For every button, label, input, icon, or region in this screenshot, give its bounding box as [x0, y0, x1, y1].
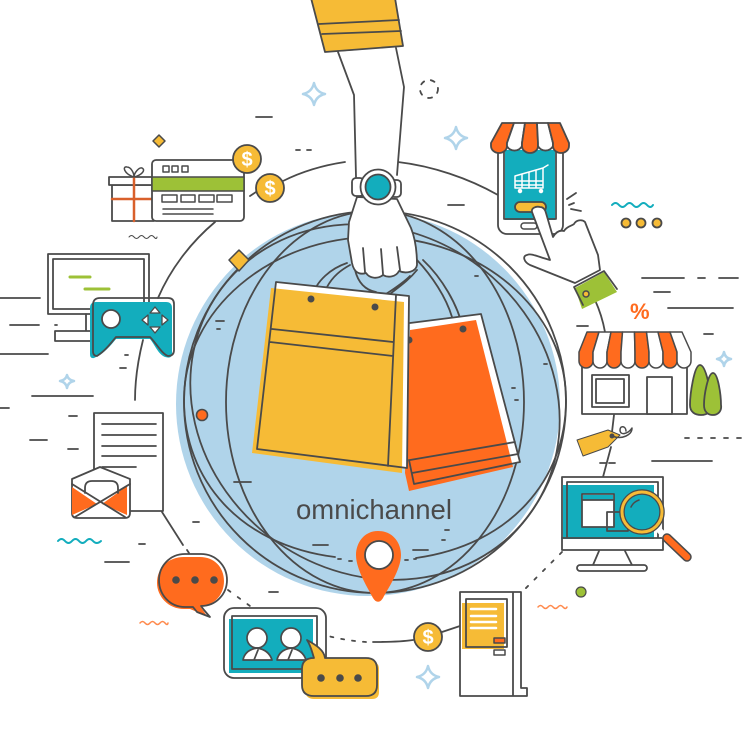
pointing hand [524, 193, 617, 309]
dollar coin 2 [250, 174, 284, 202]
dollar coin bottom: $ [422, 627, 434, 649]
shopping cart [515, 165, 548, 192]
dollar coin bottom [414, 623, 442, 651]
trees [690, 365, 721, 415]
forearm [338, 48, 404, 180]
teal wave left [58, 539, 101, 543]
yellow speech bubble [302, 640, 379, 699]
orange wave bottom-left [140, 622, 168, 624]
letter document [94, 413, 163, 511]
title text: omnichannel [296, 494, 452, 525]
awning [579, 332, 691, 368]
sleeve [311, 0, 403, 52]
yellow shopping bag [252, 263, 417, 473]
person left [243, 628, 272, 660]
outer orbit ring with connectors [135, 162, 614, 642]
magnifier [622, 492, 687, 557]
desktop computer with magnifier [562, 477, 687, 571]
decorative dashes [0, 117, 747, 592]
blue globe disc [176, 212, 560, 596]
teal wave [612, 203, 653, 207]
game controller [90, 298, 174, 358]
globe outline rings [120, 152, 630, 652]
envelope [72, 467, 130, 518]
awning [491, 123, 569, 153]
percent sign: % [630, 299, 650, 324]
location pin [356, 531, 401, 602]
dollar coin 2: $ [264, 178, 276, 200]
browser window [582, 494, 628, 531]
game monitor [48, 254, 149, 341]
kiosk ATM [460, 592, 527, 696]
dollar coin 1: $ [241, 149, 253, 171]
store icon [579, 332, 691, 414]
dashed circle accent [420, 80, 438, 98]
gift box [109, 167, 154, 221]
orange shopping bag [405, 260, 520, 491]
tablet video chat [224, 608, 326, 678]
arm and hand with watch [311, 0, 417, 278]
sparkle accents [60, 83, 731, 688]
yellow sparkles [153, 135, 249, 271]
web card [152, 160, 244, 221]
watch [352, 170, 401, 204]
three yellow dots [622, 218, 662, 228]
green dot [576, 587, 586, 597]
orange dot [196, 410, 208, 420]
gray wave [129, 236, 157, 238]
orange wave right [538, 606, 567, 608]
orange speech bubble [157, 554, 227, 617]
dollar coin 1 [233, 145, 261, 173]
phone shop icon [491, 123, 569, 234]
fist [348, 197, 417, 278]
person right [277, 628, 306, 660]
price tag [577, 427, 632, 456]
